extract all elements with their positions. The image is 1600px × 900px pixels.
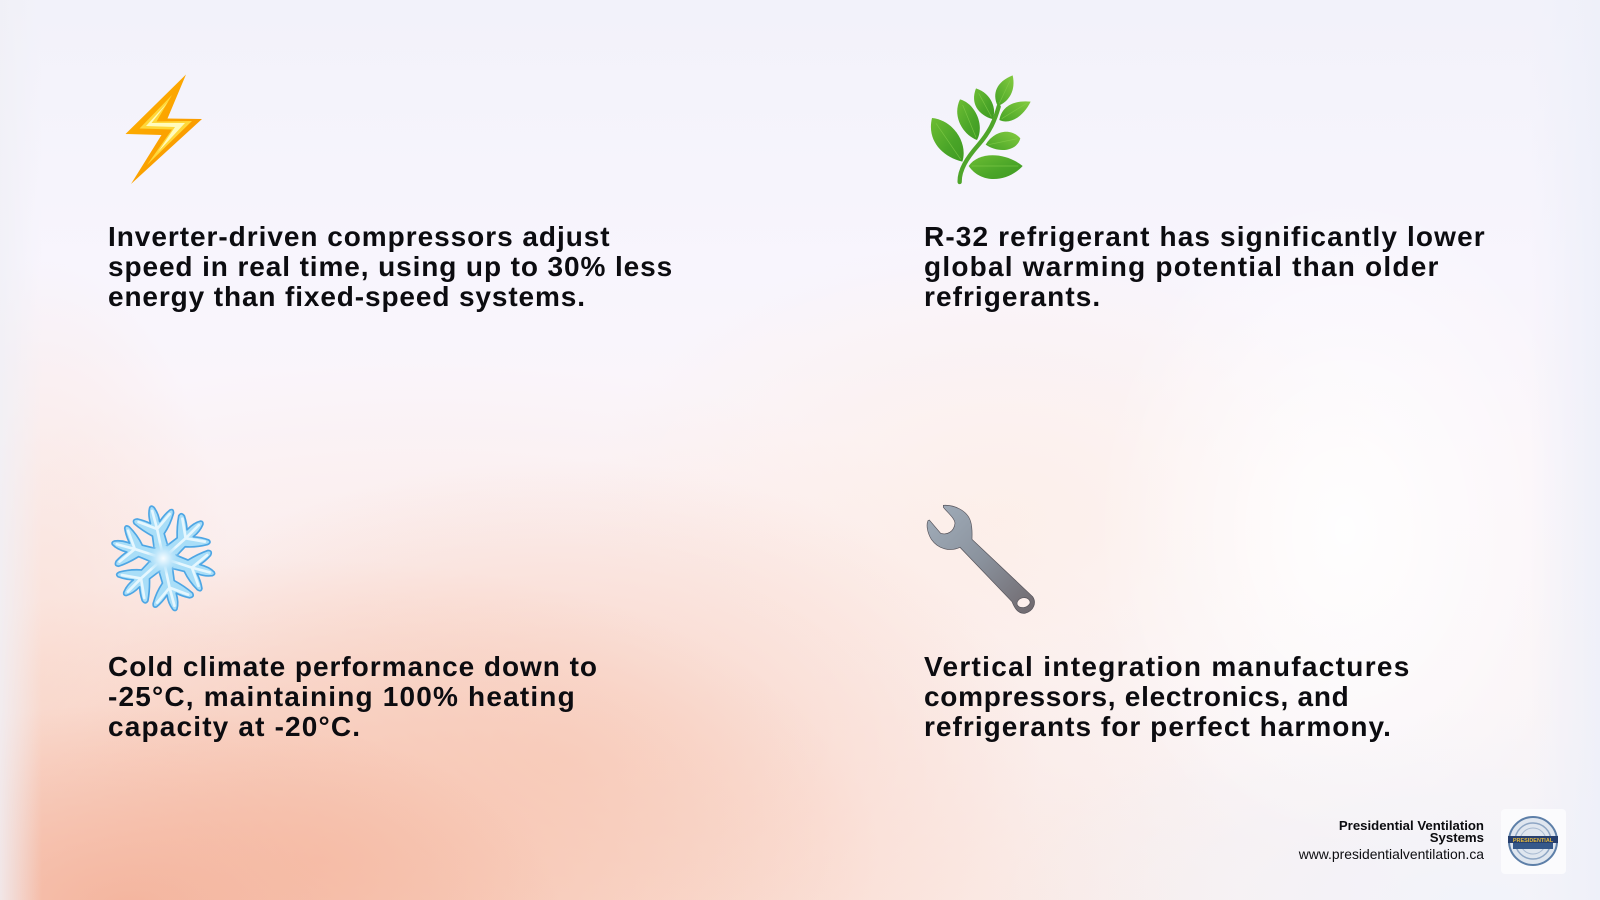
text: R-32 refrigerant: global warming potential than older [924, 251, 1440, 282]
text: R-32 refrigerant: refrigerants. [924, 281, 1101, 312]
text: R-32 refrigerant: R-32 refrigerant has significantly lower [924, 221, 1486, 252]
text: inverter compressors [108, 221, 673, 312]
text: inverter compressors: energy than fixed-speed systems. [108, 281, 586, 312]
text: vertical integration: Vertical integration manufactures [924, 651, 1411, 682]
icon: lightning bolt [126, 74, 202, 184]
icon: snowflake [111, 505, 216, 612]
text: cold climate performance: -25°C, maintaining 100% heating [108, 681, 576, 712]
logo badge: PRESIDENTIAL [1513, 838, 1554, 844]
text: cold climate performance: Cold climate performance down to [108, 651, 598, 682]
text: vertical integration [924, 651, 1411, 742]
text: inverter compressors: speed in real time, using up to 30% less [108, 251, 673, 282]
text: vertical integration: compressors, electronics, and [924, 681, 1350, 712]
text: vertical integration: refrigerants for perfect harmony. [924, 711, 1392, 742]
footer brand text [1298, 818, 1484, 862]
text: cold climate performance [108, 651, 598, 742]
footer brand text: www.presidentialventilation.ca [1299, 846, 1484, 862]
icon: green leaf branch [930, 75, 1031, 184]
text: R-32 refrigerant [924, 221, 1486, 312]
footer brand text: Presidential Ventilation [1339, 818, 1484, 833]
icon: wrench [926, 504, 1035, 614]
logo badge [1501, 809, 1566, 874]
footer brand text: Systems [1430, 830, 1484, 845]
text: cold climate performance: capacity at -20°C. [108, 711, 361, 742]
text: inverter compressors: Inverter-driven compressors adjust [108, 221, 611, 252]
